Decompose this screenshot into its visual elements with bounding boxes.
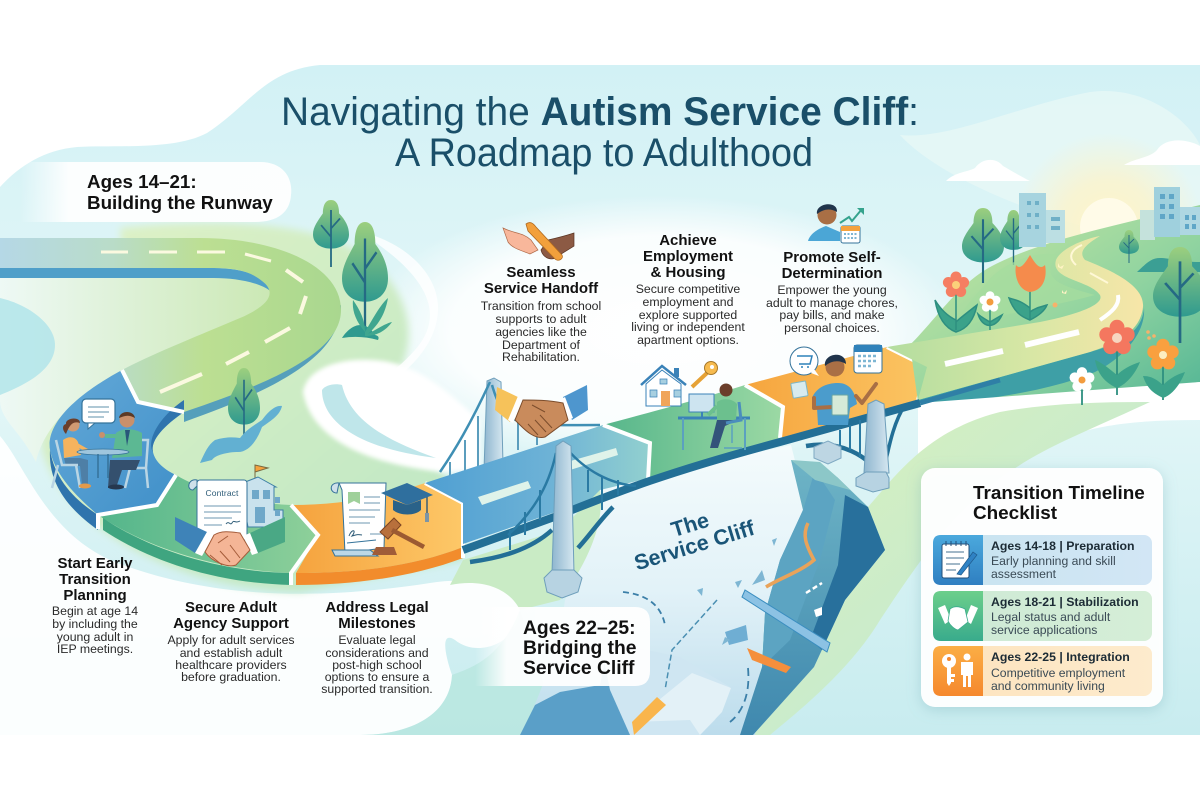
panel: ages 14-21 [20, 162, 291, 222]
checklist heading: Checklist [973, 503, 1058, 524]
icon: sun [1080, 198, 1137, 234]
panel: ages 22-25 [475, 607, 650, 686]
step: seamless service handoff: Transition from school [481, 299, 601, 313]
step: seamless service handoff: Seamless [506, 264, 576, 281]
checklist row 2: service applications [991, 623, 1097, 637]
checklist row 1 [933, 535, 1152, 585]
step: achieve employment and housing: explore supported [639, 308, 737, 322]
step: achieve employment and housing: & Housing [650, 264, 726, 281]
checklist row 3: and community living [991, 679, 1105, 693]
panel: ages 22-25: Bridging the [523, 638, 637, 659]
step: seamless service handoff: Rehabilitation. [502, 350, 580, 364]
hill foreground [957, 254, 1095, 330]
step: achieve employment and housing: employment and [643, 295, 734, 309]
icon: baton handoff [503, 223, 574, 260]
step: achieve employment and housing [631, 232, 745, 347]
light green strip [753, 402, 1150, 735]
step: secure adult agency support [167, 599, 295, 684]
panel: ages 22-25: Ages 22–25: [523, 618, 636, 639]
step: start early transition planning: Transition [59, 571, 131, 588]
tree: small top-left [313, 200, 349, 267]
step: secure adult agency support: healthcare providers [175, 658, 287, 672]
title: Navigating the Autism Service Cliff: [281, 90, 919, 134]
step: secure adult agency support: Secure Adult [185, 599, 277, 616]
step: promote self-determination: adult to manage chores, [766, 296, 898, 310]
step: seamless service handoff: agencies like the [495, 325, 587, 339]
tree: right small [1119, 230, 1139, 263]
step: secure adult agency support: before graduation. [181, 670, 281, 684]
step: address legal milestones: options to ensure a [325, 670, 429, 684]
icon: person with growth chart [808, 204, 864, 243]
right bush [1137, 258, 1200, 272]
road: green segment 5 [603, 385, 783, 480]
step: address legal milestones: Address Legal [325, 599, 429, 616]
step: achieve employment and housing: living or independent [631, 320, 745, 334]
flowers foreground right [1070, 320, 1185, 405]
broken bridge debris [623, 523, 830, 722]
step: achieve employment and housing: Achieve [659, 232, 717, 249]
icon: person at desk [678, 384, 750, 450]
bridge tower 2 [544, 441, 582, 598]
step: address legal milestones [321, 599, 433, 696]
tree: right 2 [1000, 210, 1027, 265]
lower-left pale area [0, 436, 520, 735]
step: secure adult agency support: and establish adult [180, 646, 283, 660]
step: address legal milestones: post-high school [332, 658, 422, 672]
central white haze [402, 206, 930, 442]
road: green segment 2 [98, 475, 318, 573]
step: start early transition planning: Begin at age 14 [52, 604, 138, 618]
icon: bridge handshake [495, 385, 588, 438]
white wave right [918, 382, 1200, 454]
buildings left [1019, 193, 1065, 247]
road: orange segment 6 [745, 347, 927, 438]
road: orange segment 3 [291, 483, 463, 573]
tree: right 1 [962, 208, 1004, 283]
top-left green land [41, 223, 465, 592]
step: seamless service handoff: Department of [502, 338, 581, 352]
checklist heading [973, 483, 1145, 524]
label: the service cliff: Service Cliff [631, 516, 758, 575]
checklist row 3 [933, 646, 1152, 696]
step: promote self-determination: Empower the young [777, 283, 887, 297]
hairpin interior [0, 268, 272, 462]
cliff rock [740, 460, 885, 735]
cloud left [946, 160, 1030, 181]
checklist row 3: Ages 22-25 | Integration [991, 650, 1130, 664]
step: address legal milestones: Milestones [338, 615, 416, 632]
icon: contract handshake [175, 465, 285, 566]
left land under bridge [450, 490, 601, 610]
panel: ages 22-25: Service Cliff [523, 658, 635, 679]
step: promote self-determination: Promote Self- [783, 249, 881, 266]
step: seamless service handoff [481, 264, 601, 364]
panel: ages 14-21: Ages 14–21: [87, 171, 197, 192]
road: winding path [887, 236, 1144, 408]
segment chevrons upper [603, 347, 927, 480]
title [281, 90, 919, 175]
orange rim [296, 547, 463, 585]
step: promote self-determination: Determination [782, 265, 882, 282]
bridge deck and cables [463, 380, 1000, 562]
sun glow [1026, 144, 1189, 250]
step: promote self-determination: personal choices. [784, 321, 880, 335]
back bridge tower [440, 378, 600, 480]
icon: house and key [641, 362, 718, 406]
green rim [103, 518, 291, 585]
step: start early transition planning: Start Early [57, 555, 133, 572]
tree: large top-left [342, 222, 388, 332]
flowers on hill [935, 255, 1067, 332]
lower left rock [520, 673, 731, 735]
step: start early transition planning: by including the [52, 617, 138, 631]
chasm background [520, 445, 810, 735]
step: achieve employment and housing: Secure competitive [636, 282, 740, 296]
cloud right [1124, 140, 1200, 165]
lake [200, 406, 282, 463]
bridge tower 3 [856, 400, 889, 492]
step: start early transition planning: Planning [63, 587, 127, 604]
blue inner wall [151, 400, 184, 452]
buildings right [1140, 187, 1200, 240]
road chevrons [98, 370, 463, 585]
road: bridge blue segment 4 [425, 425, 650, 544]
step: achieve employment and housing: apartment options. [637, 333, 739, 347]
step: promote self-determination: pay bills, and make [779, 308, 885, 322]
checklist row 1: assessment [991, 567, 1057, 581]
step: seamless service handoff: Service Handoff [484, 280, 599, 297]
step: secure adult agency support: Agency Support [173, 615, 289, 632]
step: achieve employment and housing: Employment [643, 248, 733, 265]
bottom teal blob [364, 652, 542, 735]
step: address legal milestones: Evaluate legal [338, 633, 416, 647]
right land [910, 205, 1200, 402]
step: address legal milestones: supported transition. [321, 682, 433, 696]
checklist row 2 [933, 591, 1152, 641]
road: blue segment 1 [50, 370, 184, 515]
tree: mid road [228, 368, 260, 434]
panel: transition timeline checklist [921, 468, 1163, 707]
right swirl strokes [375, 236, 438, 368]
checklist row 1: Early planning and skill [991, 554, 1116, 568]
background hill haze [900, 91, 1200, 207]
icon: meeting scene [52, 399, 148, 490]
icon: contract handshake: Contract [206, 488, 239, 498]
icon: legal documents [331, 483, 433, 556]
panel: ages 14-21: Building the Runway [87, 192, 273, 213]
tree: far right [1153, 247, 1200, 343]
small pier [814, 441, 841, 464]
icon: person with tablet, cart and calendar [790, 345, 882, 425]
step: start early transition planning [52, 555, 138, 656]
white swoosh with teal ring [303, 360, 480, 472]
blue rim [50, 450, 98, 530]
step: secure adult agency support: Apply for adult services [167, 633, 295, 647]
checklist row 2: Legal status and adult [991, 610, 1111, 624]
step: start early transition planning: IEP meetings. [57, 642, 133, 656]
checklist row 1: Ages 14-18 | Preparation [991, 539, 1135, 553]
step: promote self-determination [766, 249, 898, 335]
title: A Roadmap to Adulthood [395, 131, 813, 175]
road: upper green hairpin [0, 238, 341, 422]
step: address legal milestones: considerations and [325, 646, 429, 660]
checklist row 3: Competitive employment [991, 666, 1126, 680]
bush: top-left [342, 298, 392, 340]
step: seamless service handoff: supports to adult [496, 312, 587, 326]
left teal blob [0, 298, 55, 395]
step: start early transition planning: young adult in [57, 630, 133, 644]
label: the service cliff: The [668, 508, 712, 542]
bridge dashes [478, 448, 618, 505]
checklist row 2: Ages 18-21 | Stabilization [991, 595, 1139, 609]
checklist heading: Transition Timeline [973, 483, 1145, 504]
